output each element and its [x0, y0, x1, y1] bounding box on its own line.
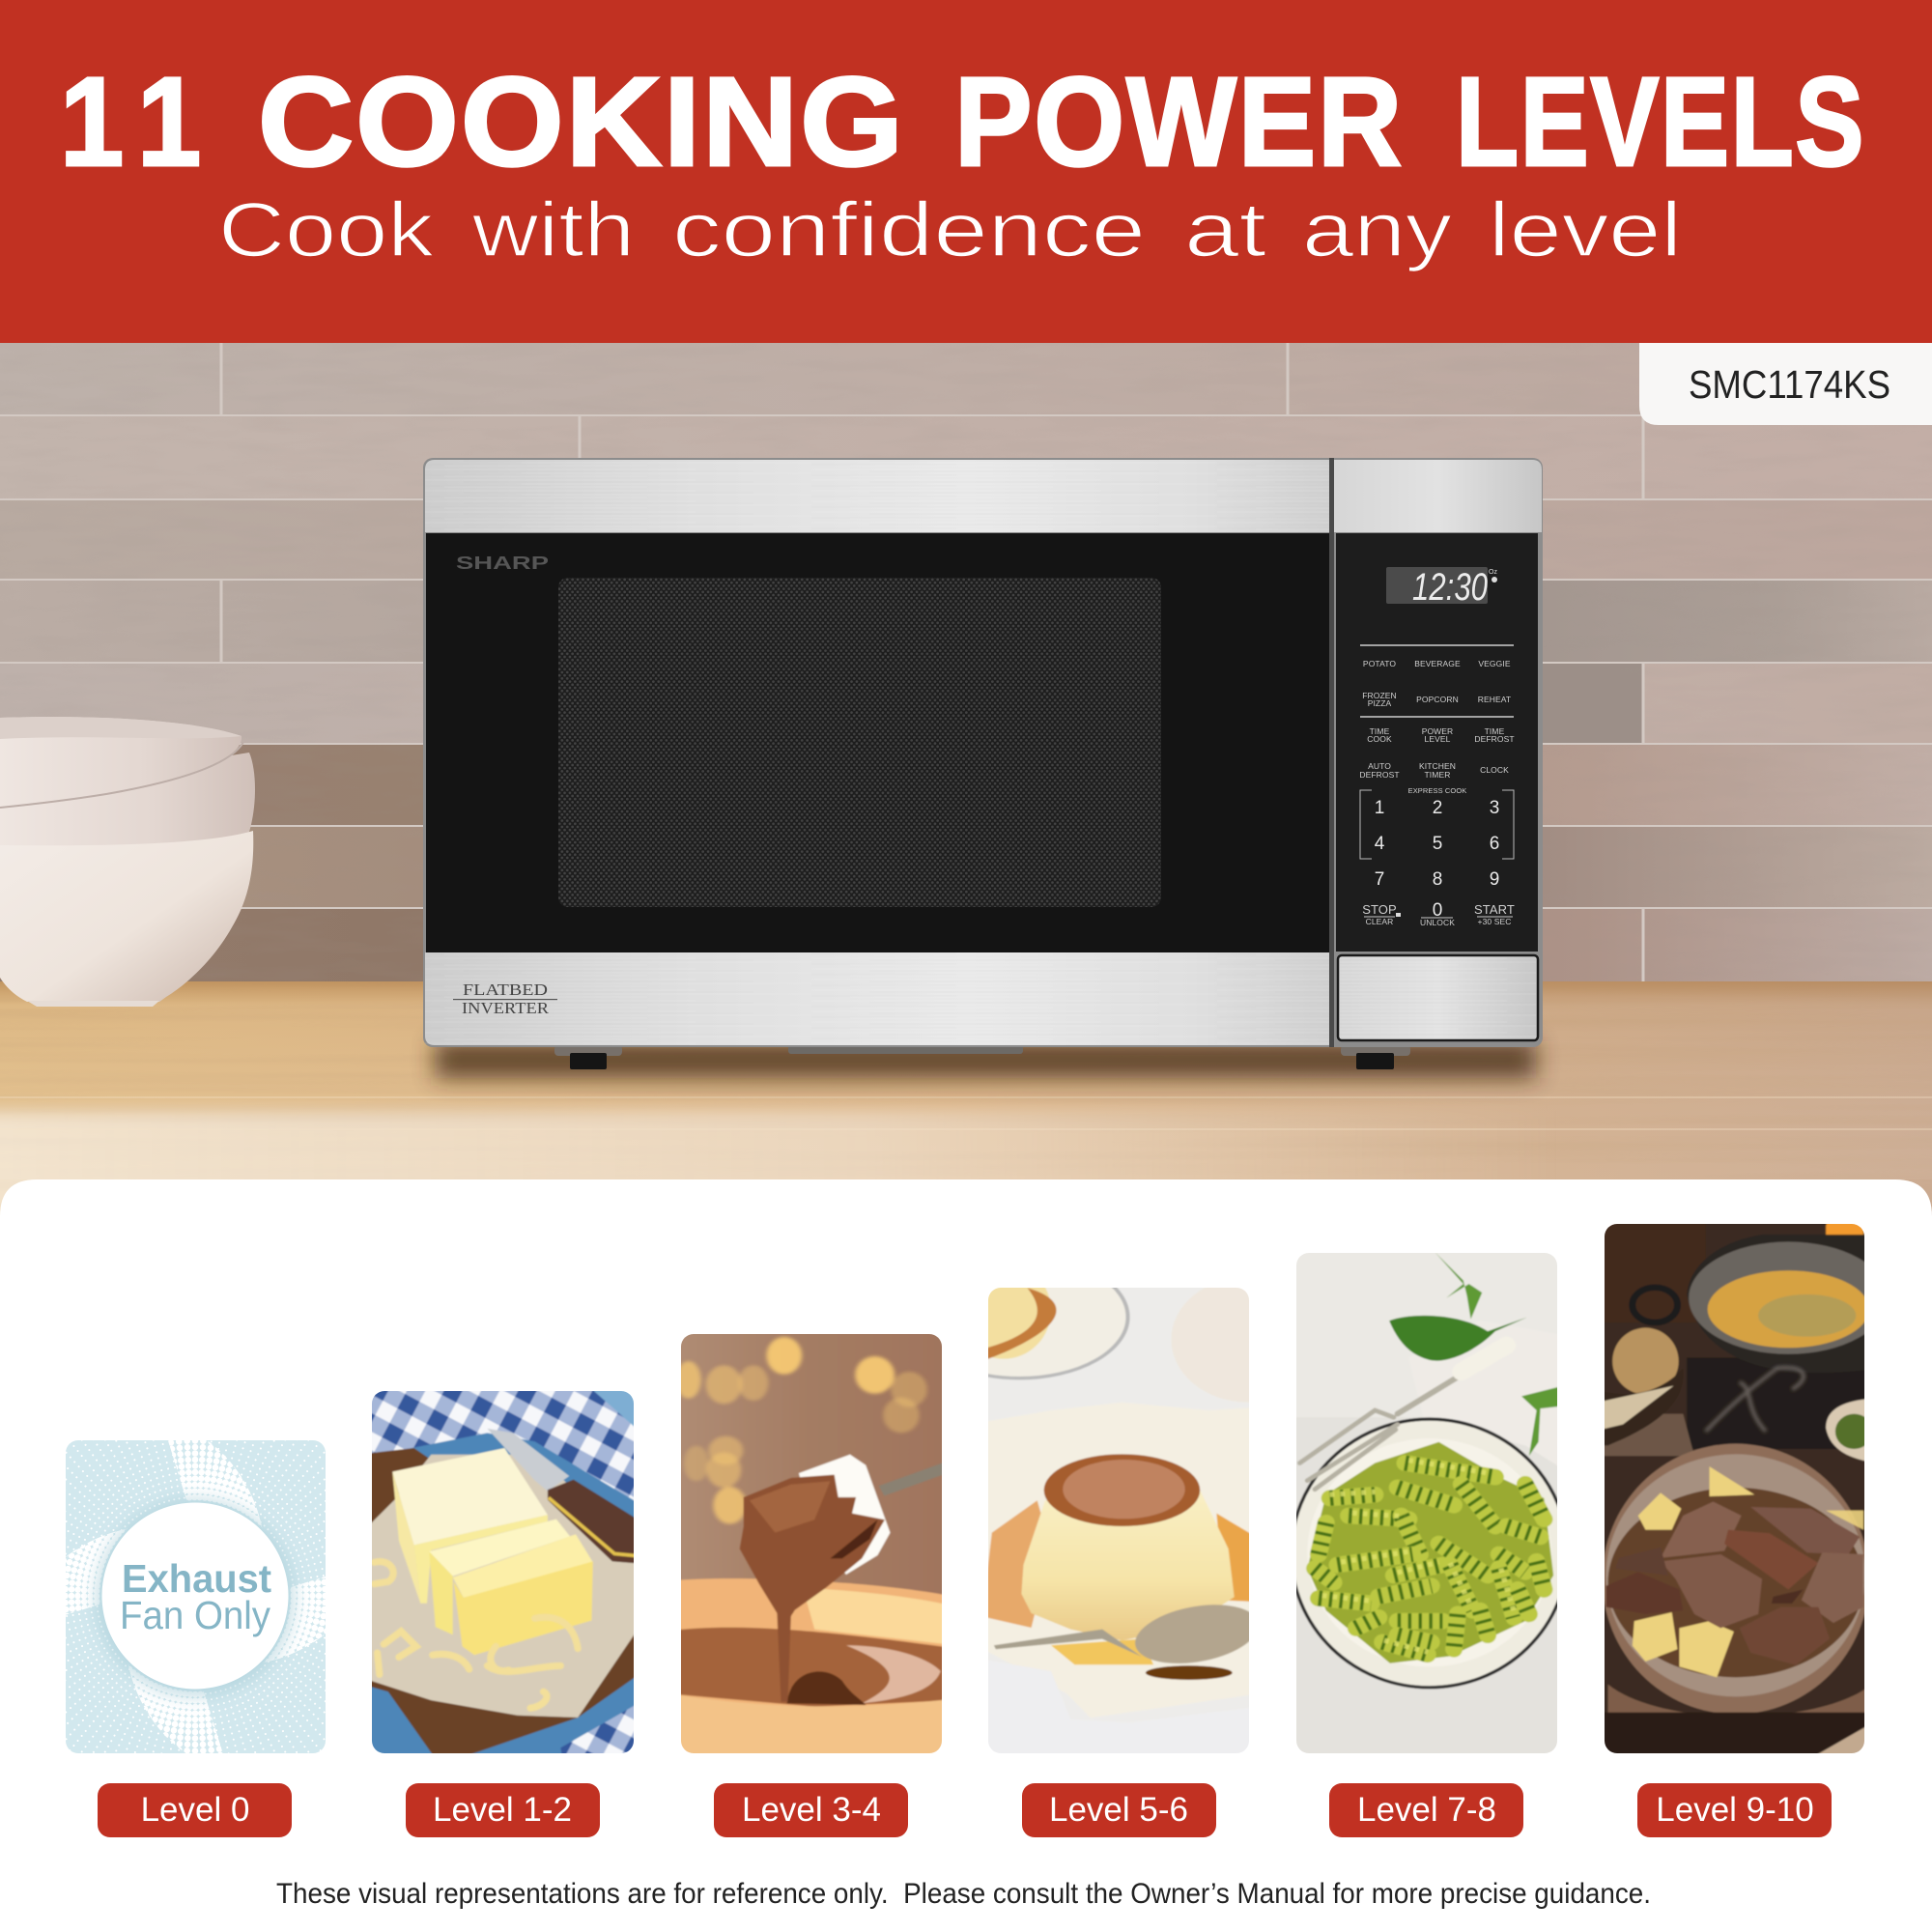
flan body: [1021, 1488, 1235, 1640]
top bowl: [0, 717, 243, 808]
keypad labels: 8: [1433, 869, 1442, 890]
subtitle: level: [1489, 186, 1682, 272]
steam: [1706, 1368, 1804, 1432]
marshmallow: [799, 1455, 891, 1575]
bread roll: [1612, 1328, 1679, 1395]
melted chocolate: [668, 1628, 956, 1707]
keypad labels: START: [1474, 902, 1515, 917]
keypad labels: 6: [1490, 834, 1499, 854]
keypad labels: +30 SEC: [1478, 917, 1511, 926]
bowl: [1292, 1419, 1568, 1688]
level 5-6 card: flan: [988, 1288, 1249, 1753]
keypad labels: POTATO: [1363, 659, 1396, 668]
back lace plate: [1171, 1277, 1325, 1403]
model tag: SMC1174KS: [1689, 362, 1890, 407]
keypad labels: BEVERAGE: [1414, 659, 1461, 668]
subtitle: with: [471, 186, 635, 272]
parchment: [372, 1453, 634, 1719]
cutting board: [372, 1447, 634, 1753]
fork: [1300, 1346, 1507, 1490]
pasta mound: [1307, 1442, 1553, 1663]
pill: level 1-2: [406, 1783, 600, 1837]
flatbed inverter badge: FLATBED: [463, 980, 548, 999]
knife: [487, 1429, 569, 1492]
control panel: [1336, 533, 1538, 952]
plate: [1603, 1444, 1869, 1714]
table: [1593, 1414, 1694, 1456]
keypad labels: CLEAR: [1366, 917, 1393, 926]
level 7-8 card: pesto pasta: [1285, 1241, 1571, 1765]
centre disc: [96, 1498, 295, 1697]
door: [426, 533, 1329, 952]
title: 1: [60, 50, 126, 192]
caramel pool: [982, 1500, 1051, 1628]
keypad labels: KITCHEN: [1419, 761, 1456, 771]
keypad labels: LEVEL: [1425, 734, 1451, 744]
keypad labels: FROZEN: [1362, 691, 1397, 700]
pill: level 9-10: Level 9-10: [1656, 1791, 1814, 1829]
keypad labels: POPCORN: [1416, 695, 1459, 704]
level 9-10 card: beef stew: [1593, 1217, 1888, 1765]
keypad labels: 1: [1375, 798, 1384, 818]
gingham cloth: [372, 1391, 634, 1501]
clock display: 12:30: [1412, 566, 1488, 609]
butter front block: [453, 1534, 593, 1598]
level 3-4 card: chocolate marshmallow: [681, 1334, 942, 1753]
footer disclaimer: These visual representations are for reference only. Please consult the Owner’s Manual for more precise guidance.: [276, 1878, 1651, 1910]
flame: [1826, 1222, 1863, 1241]
microwave: [423, 458, 1543, 1069]
feet: [554, 1045, 1410, 1069]
keypad labels: TIMER: [1425, 770, 1450, 780]
pot: [1633, 1235, 1888, 1373]
keypad labels: AUTO: [1368, 761, 1391, 771]
side dish: [1826, 1398, 1879, 1463]
flatbed inverter badge: INVERTER: [462, 999, 550, 1017]
keypad labels: VEGGIE: [1478, 659, 1511, 668]
clock display: Oz: [1489, 569, 1497, 576]
keypad labels: DEFROST: [1359, 770, 1400, 780]
keypad labels: CLOCK: [1480, 765, 1509, 775]
bokeh lights: [676, 1337, 927, 1524]
chocolate drip: [740, 1475, 885, 1702]
title: 1: [137, 50, 203, 192]
pill: level 5-6: [1022, 1783, 1216, 1837]
keypad labels: STOP: [1362, 902, 1397, 917]
subtitle: Cook: [218, 186, 435, 272]
butter shavings: [374, 1562, 578, 1708]
level 0 card: exhaust fan only: [66, 1440, 326, 1753]
level 1-2 card: butter: [372, 1391, 634, 1753]
cup: [681, 1577, 942, 1708]
model tag: [1639, 343, 1932, 425]
caramel top: [1044, 1454, 1200, 1526]
potato chunks: [1633, 1466, 1863, 1677]
body: [423, 458, 1543, 1047]
SHARP logo: SHARP: [456, 554, 549, 573]
pill: level 0: [98, 1783, 292, 1837]
title: COOKING: [258, 50, 905, 192]
title: POWER: [954, 50, 1404, 192]
pill: level 7-8: Level 7-8: [1357, 1791, 1496, 1829]
keypad labels: TIME: [1370, 726, 1390, 736]
keypad labels: 3: [1490, 798, 1499, 818]
subtitle: confidence: [672, 186, 1146, 272]
keypad labels: 2: [1433, 798, 1442, 818]
subtitle: any: [1302, 186, 1452, 272]
subtitle: [218, 186, 1682, 272]
clock display: [1386, 566, 1497, 609]
radial halftone dots: [66, 1440, 326, 1753]
keypad labels: 9: [1490, 869, 1499, 890]
door handle box: [1338, 955, 1538, 1040]
napkin: [976, 1659, 1260, 1761]
flatbed inverter badge: [453, 980, 557, 1017]
keypad labels: DEFROST: [1474, 734, 1515, 744]
keypad labels: TIME: [1485, 726, 1505, 736]
pill: level 7-8: [1329, 1783, 1523, 1837]
keypad labels: UNLOCK: [1420, 918, 1455, 927]
wooden counter: [0, 981, 1932, 1223]
spoon: [994, 1630, 1142, 1657]
pill: level 3-4: [714, 1783, 908, 1837]
pill: level 1-2: Level 1-2: [433, 1791, 572, 1829]
pill: level 9-10: [1637, 1783, 1832, 1837]
keypad labels: 0: [1433, 900, 1442, 921]
keypad labels: REHEAT: [1478, 695, 1511, 704]
bowl foot: [27, 1001, 159, 1007]
back plate: [911, 1256, 1128, 1378]
keypad labels: EXPRESS COOK: [1408, 786, 1466, 795]
bowls: [0, 717, 255, 1007]
header banner: [0, 0, 1932, 343]
fork: [882, 1466, 949, 1491]
keypad labels: PIZZA: [1368, 698, 1392, 708]
centre disc: Fan Only: [120, 1593, 270, 1637]
main plate: [988, 1453, 1248, 1681]
keypad labels: [1359, 659, 1515, 927]
butter slice: [429, 1520, 570, 1577]
napkin: [1408, 1321, 1571, 1473]
kitchen scene backdrop: [0, 343, 1932, 1223]
level pills: [98, 1783, 1832, 1837]
tiled wall: [0, 343, 1932, 981]
middle bowl: [0, 753, 255, 850]
door divider: [1329, 458, 1334, 1047]
keypad labels: 7: [1375, 869, 1384, 890]
keypad labels: 5: [1433, 834, 1442, 854]
pill: level 3-4: Level 3-4: [742, 1791, 881, 1829]
keypad labels: COOK: [1367, 734, 1392, 744]
pill: level 5-6: Level 5-6: [1049, 1791, 1188, 1829]
keypad labels: POWER: [1422, 726, 1453, 736]
bottom bowl: [0, 831, 253, 1002]
beef chunks: [1606, 1502, 1863, 1665]
control panel top strip: [1334, 460, 1542, 532]
top steel strip: [425, 460, 1329, 532]
keypad labels: 4: [1375, 834, 1385, 854]
bottom steel strip: [425, 952, 1329, 1045]
butter block: [392, 1448, 548, 1545]
centre disc: Exhaust: [122, 1556, 271, 1601]
basil leaves: [1389, 1252, 1571, 1456]
white levels panel: [0, 1179, 1932, 1932]
title: [60, 50, 1865, 192]
door window mesh: [558, 578, 1161, 907]
pill: level 0: Level 0: [141, 1791, 249, 1829]
subtitle: at: [1184, 186, 1266, 272]
